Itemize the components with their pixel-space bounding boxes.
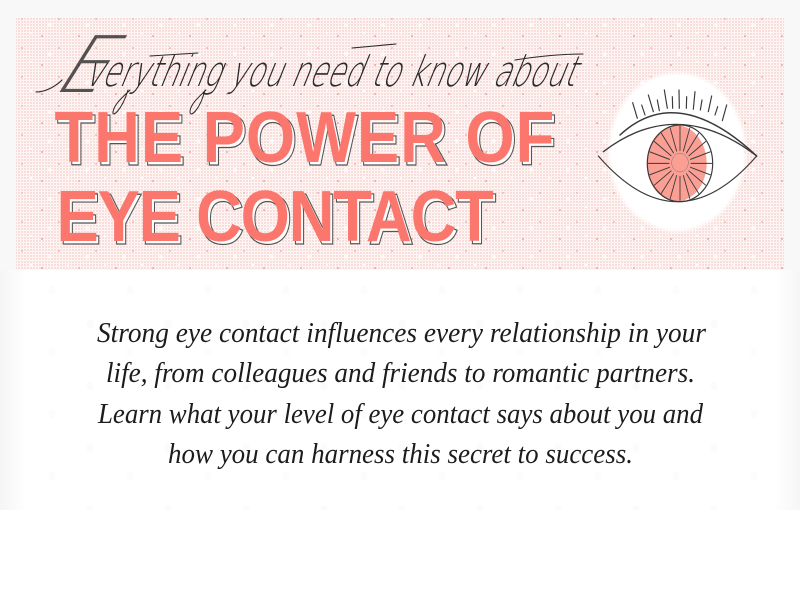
heading: THE POWER OF: THE POWER OF (57, 101, 557, 181)
heading: EYE CONTACT: EYE CONTACT (56, 177, 494, 257)
heading: script tagline: verything you need to know about (80, 48, 590, 97)
heading: script tagline: E (38, 21, 144, 111)
text block: introduction (97, 318, 707, 470)
panel: header banner (16, 18, 784, 270)
heading: THE POWER OF: THE POWER OF (54, 98, 554, 178)
text block: introduction: Learn what your level of eye contact says about you and (97, 399, 704, 430)
heading: EYE CONTACT: EYE CONTACT (59, 180, 496, 260)
icon: eye (598, 70, 757, 234)
text block: introduction: how you can harness this secret to success. (168, 439, 633, 470)
text block: introduction: life, from colleagues and friends to romantic partners. (106, 358, 695, 389)
text block: introduction: Strong eye contact influences every relationship in your (97, 318, 707, 349)
heading: script tagline (36, 21, 590, 114)
